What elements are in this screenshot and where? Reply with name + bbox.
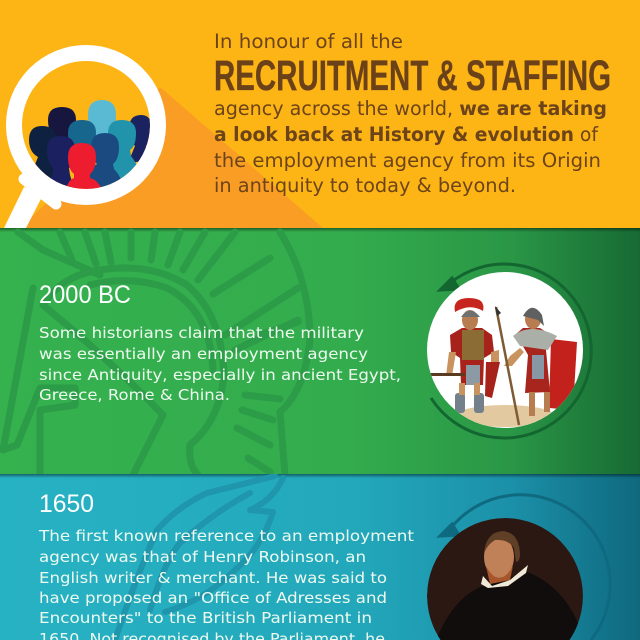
arrow: circular xyxy=(431,264,591,438)
icon: magnifying glass with crowd xyxy=(4,53,158,228)
watermark: quill xyxy=(115,476,283,640)
text block: English writer & merchant. He was said to xyxy=(39,569,387,587)
panel: 2000 BC xyxy=(0,228,640,475)
intro text xyxy=(214,30,611,197)
text block: The first known reference to an employment xyxy=(38,527,414,545)
text block: was essentially an employment agency xyxy=(39,345,368,363)
spear xyxy=(496,307,519,425)
magnifier long shadow xyxy=(20,87,323,228)
intro text: the employment agency from its Origin xyxy=(214,149,601,172)
illustration: roman soldiers xyxy=(427,272,583,428)
arrow: circular xyxy=(440,495,610,640)
intro text: agency across the world, we are taking xyxy=(214,97,607,120)
watermark: helmet xyxy=(3,232,310,475)
intro text: a look back at History & evolution of xyxy=(214,123,599,146)
text block xyxy=(39,324,401,404)
text block: have proposed an "Office of Adresses and xyxy=(39,589,387,607)
intro text: In honour of all the xyxy=(214,30,403,53)
text block: since Antiquity, especially in ancient Egypt, xyxy=(39,366,401,384)
text block: agency was that of Henry Robinson, an xyxy=(39,548,366,566)
panel: 1650 xyxy=(0,474,640,640)
intro text: in antiquity to today & beyond. xyxy=(214,174,516,197)
text block: Greece, Rome & China. xyxy=(39,386,230,404)
soldier left xyxy=(450,328,494,385)
heading: 1650: 1650 xyxy=(39,490,94,518)
text block xyxy=(38,527,414,640)
panel: header xyxy=(4,33,610,228)
text block: Encounters" to the British Parliament in xyxy=(39,609,372,627)
text block: Some historians claim that the military xyxy=(39,324,364,342)
portrait: Henry Robinson xyxy=(427,518,584,640)
soldier right xyxy=(549,339,577,410)
heading: 2000 BC: 2000 BC xyxy=(39,281,131,309)
